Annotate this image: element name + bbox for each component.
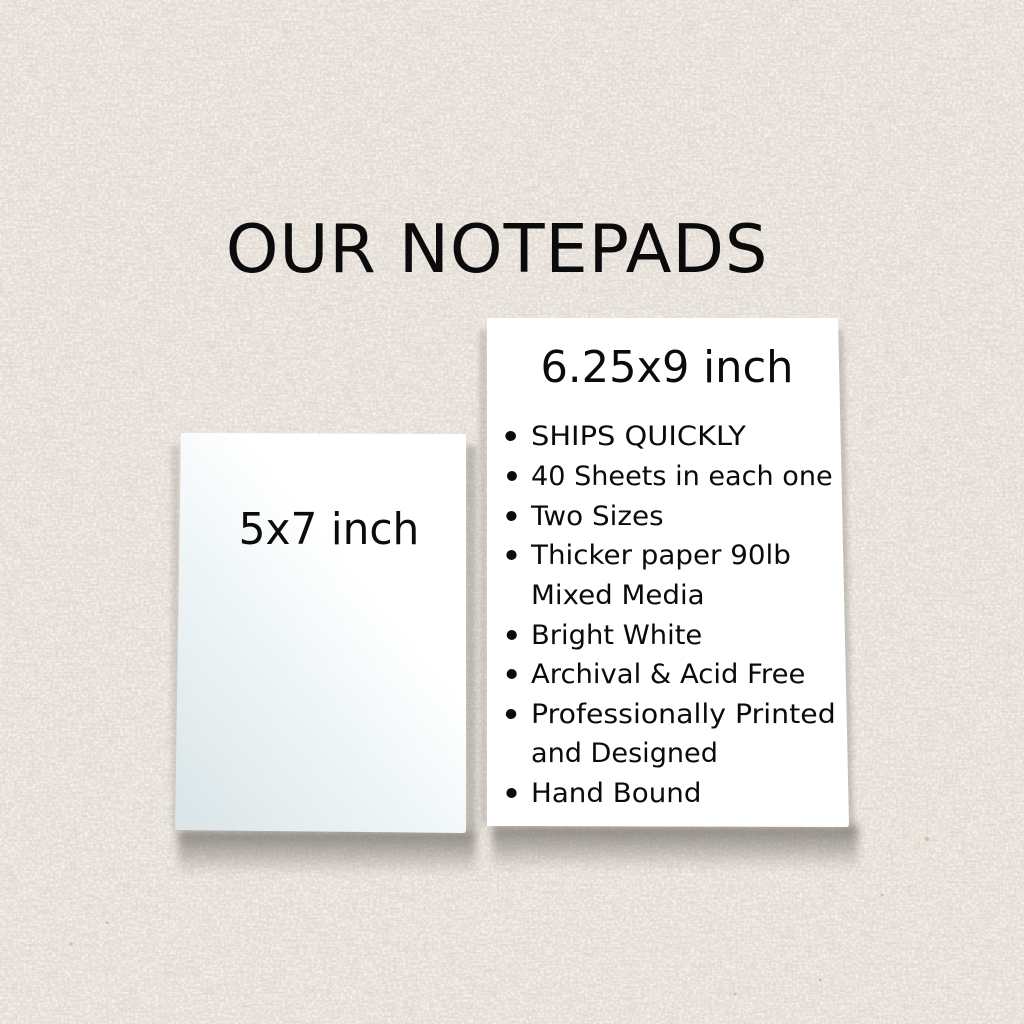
item: hand bound: Hand Bound <box>531 778 701 809</box>
notepad: 6.25x9 sheet <box>487 318 849 827</box>
shadow: small pad <box>172 445 476 876</box>
item: professionally printed: Professionally Printed <box>531 699 836 730</box>
item: sizes: Two Sizes <box>531 501 664 532</box>
item: and designed: and Designed <box>531 738 718 769</box>
item: mixed media: Mixed Media <box>531 580 705 611</box>
label: 5x7 inch: 5x7 inch <box>239 504 419 555</box>
item: ships quickly: SHIPS QUICKLY <box>531 421 746 452</box>
item: sheets: 40 Sheets in each one <box>531 461 833 492</box>
item: bright white: Bright White <box>531 620 702 651</box>
shadow: large pad <box>480 330 858 871</box>
item: thicker paper: Thicker paper 90lb <box>531 540 791 571</box>
label: 6.25x9 inch: 6.25x9 inch <box>540 342 794 393</box>
notepad: 5x7 sheet <box>175 433 466 833</box>
fabric flecks <box>70 837 929 996</box>
item: archival: Archival & Acid Free <box>531 659 805 690</box>
title: OUR NOTEPADS <box>226 210 768 288</box>
